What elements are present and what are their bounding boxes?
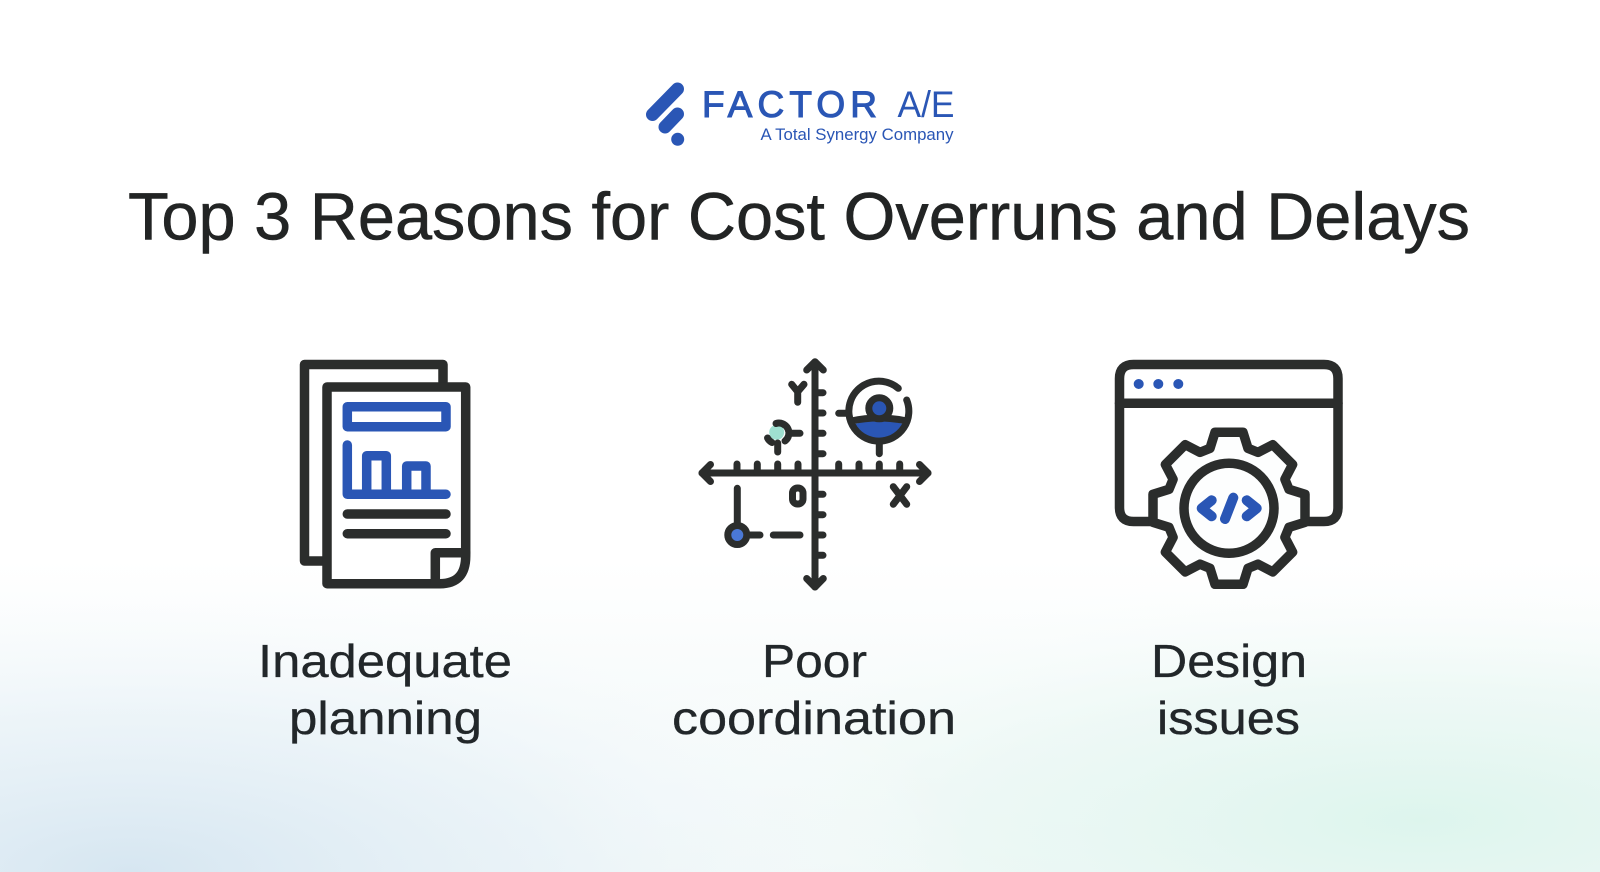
icon: logo mark xyxy=(652,89,684,146)
small marker xyxy=(769,425,784,440)
icon: coordinate axes xyxy=(702,362,928,587)
lower-left marker xyxy=(737,488,800,535)
logo: Factor A/E xyxy=(652,84,954,146)
label: inadequate planning: planning xyxy=(289,692,482,744)
label: poor coordination: coordination xyxy=(672,692,956,744)
logo tagline: A Total Synergy Company xyxy=(760,125,954,144)
logo wordmark: FACTOR xyxy=(702,84,877,125)
logo suffix: A/E xyxy=(898,84,954,125)
label: design issues: issues xyxy=(1157,692,1300,744)
label: design issues: Design xyxy=(1151,635,1307,687)
icon: browser window with gear xyxy=(1120,364,1338,584)
person marker xyxy=(855,420,903,442)
panel: design issues xyxy=(1120,364,1338,744)
label: inadequate planning xyxy=(258,635,512,744)
panel: poor coordination xyxy=(672,362,956,744)
label: poor coordination xyxy=(672,635,956,744)
title: Top 3 Reasons for Cost Overruns and Delays xyxy=(128,179,1470,254)
label: design issues xyxy=(1151,635,1307,744)
label: inadequate planning: Inadequate xyxy=(258,635,512,687)
panel: inadequate planning xyxy=(258,364,512,744)
label: poor coordination: Poor xyxy=(762,635,867,687)
icon: report documents xyxy=(304,364,466,584)
